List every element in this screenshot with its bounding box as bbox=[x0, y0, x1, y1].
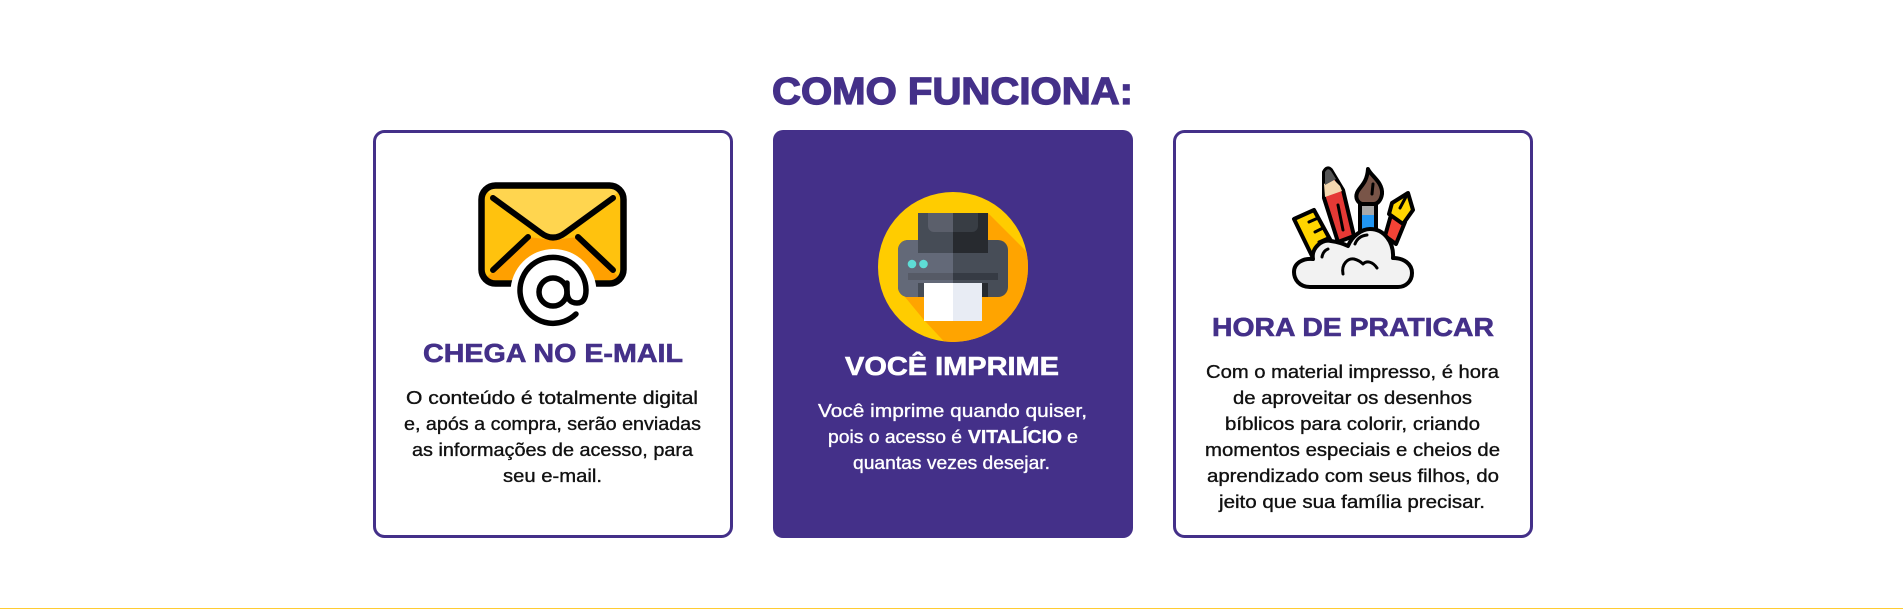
body text bbox=[1205, 362, 1500, 512]
body text: momentos especiais e cheios de bbox=[1205, 440, 1500, 460]
heading: HORA DE PRATICAR bbox=[1212, 312, 1494, 342]
body text: quantas vezes desejar. bbox=[853, 453, 1050, 473]
body text: Com o material impresso, é hora bbox=[1206, 362, 1500, 382]
heading: VOCÊ IMPRIME bbox=[845, 351, 1059, 381]
heading: CHEGA NO E-MAIL bbox=[423, 338, 683, 368]
card outline bbox=[1174, 132, 1532, 536]
body text bbox=[818, 401, 1087, 473]
icon: printer bbox=[878, 192, 1028, 342]
card outline bbox=[374, 132, 732, 536]
icon: art supplies on a cloud bbox=[1294, 168, 1413, 287]
body text: e, após a compra, serão enviadas bbox=[404, 414, 701, 434]
panel: chega no e-mail bbox=[374, 132, 732, 536]
body text: jeito que sua família precisar. bbox=[1218, 492, 1485, 512]
body text: de aproveitar os desenhos bbox=[1233, 388, 1472, 408]
body text bbox=[404, 388, 701, 486]
body text: Você imprime quando quiser, bbox=[818, 401, 1087, 421]
body text: e bbox=[1067, 427, 1078, 447]
card background bbox=[773, 130, 1133, 538]
body text: as informações de acesso, para bbox=[412, 440, 694, 460]
title: COMO FUNCIONA: bbox=[772, 71, 1133, 113]
panel: hora de praticar bbox=[1174, 132, 1532, 536]
icon: envelope with at sign bbox=[482, 186, 624, 335]
body text: aprendizado com seus filhos, do bbox=[1207, 466, 1499, 486]
body text: pois o acesso é bbox=[828, 427, 962, 447]
body text: bíblicos para colorir, criando bbox=[1225, 414, 1480, 434]
body text: seu e-mail. bbox=[503, 466, 602, 486]
panel: voce imprime bbox=[773, 130, 1133, 538]
body text: VITALÍCIO bbox=[968, 426, 1062, 447]
body text: O conteúdo é totalmente digital bbox=[406, 388, 698, 408]
